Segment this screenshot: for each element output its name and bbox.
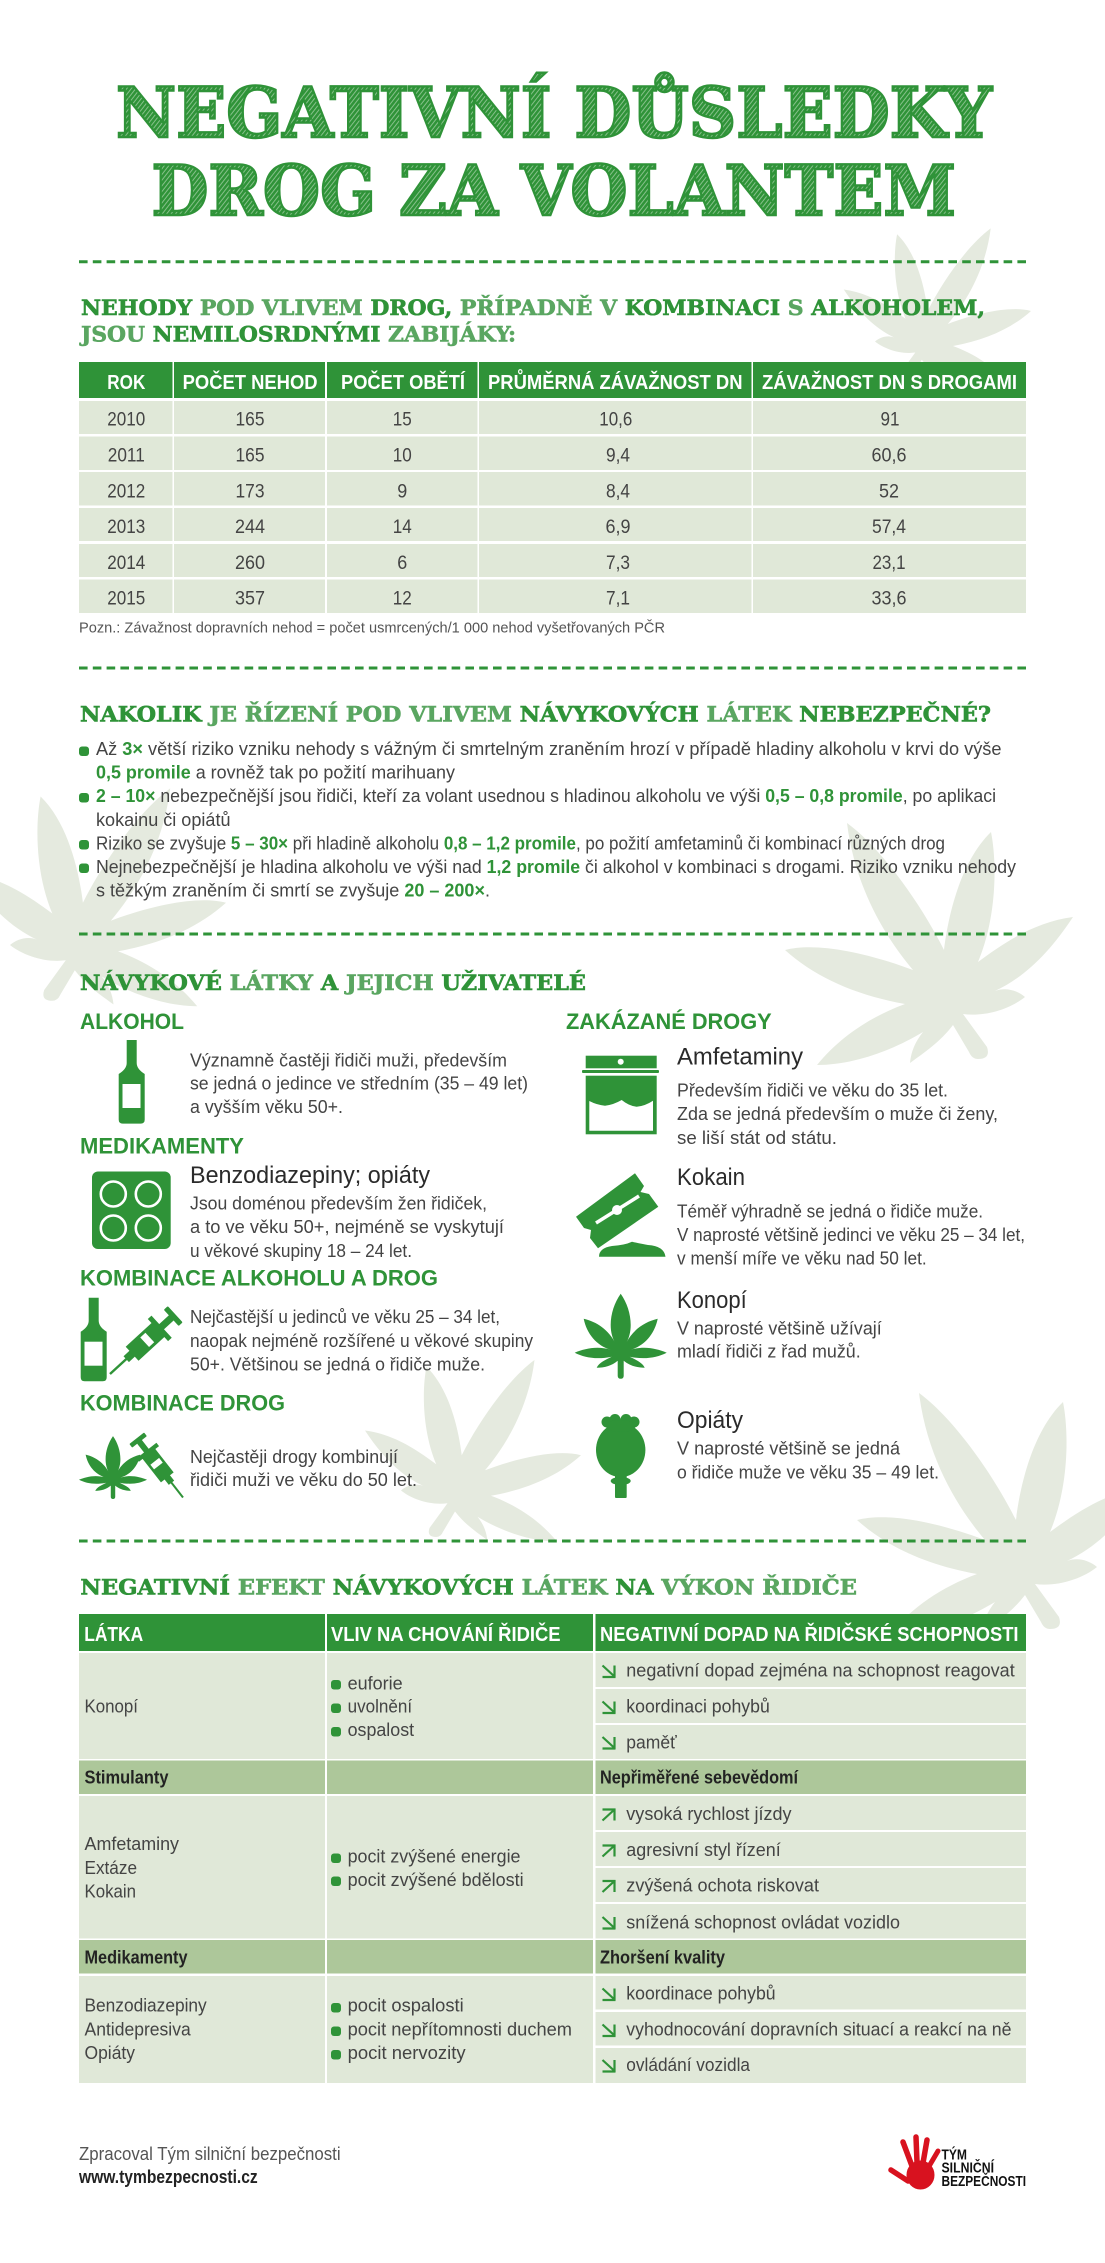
block: medication: MEDIKAMENTY	[80, 1134, 244, 1159]
block: alcohol and drugs	[80, 1266, 534, 1385]
table header: VLIV NA CHOVÁNÍ ŘIDIČE	[331, 1622, 561, 1646]
table rows: 91	[880, 410, 900, 431]
bullet list: risk levels: kokainu či opiátů	[96, 809, 230, 830]
row: stimulants: vysoká rychlost jízdy	[626, 1803, 792, 1824]
bullet list: risk levels: 2 – 10× nebezpečnější jsou řidiči, kteří za volant usednou s hladinou alkoholu ve výši 0,5 – 0,8 promile, po aplikaci	[96, 785, 996, 806]
table header: PRŮMĚRNÁ ZÁVAŽNOST DN	[488, 368, 742, 394]
block: cocaine: V naprosté většině jedinci ve věku 25 – 34 let,	[677, 1224, 1025, 1245]
block: cannabis: V naprosté většině užívají	[677, 1317, 883, 1338]
row: stimulants: snížená schopnost ovládat vozidlo	[626, 1911, 900, 1932]
block: alcohol: se jedná o jedince ve středním (35 – 49 let)	[190, 1072, 528, 1093]
icon: pill pack	[92, 1172, 171, 1249]
icon: bottle and syringe	[81, 1298, 185, 1385]
row: medication: koordinace pohybů	[626, 1982, 776, 2003]
block: cannabis: mladí řidiči z řad mužů.	[677, 1341, 861, 1362]
logo: Tým silniční bezpečnosti: TÝM	[942, 2146, 967, 2164]
row: stimulants: agresivní styl řízení	[626, 1839, 782, 1860]
row: cannabis: negativní dopad zejména na schopnost reagovat	[626, 1660, 1015, 1681]
row: cannabis: euforie	[348, 1672, 403, 1693]
bullet list: risk levels	[79, 738, 1017, 901]
table rows: 244	[235, 517, 265, 538]
block: alcohol: ALKOHOL	[80, 1009, 184, 1034]
block: amphetamines	[582, 1043, 998, 1148]
heading: accidents: JSOU NEMILOSRDNÝMI ZABIJÁKY:	[79, 321, 516, 348]
table: accidents by year	[79, 362, 1026, 613]
block: drug combinations: KOMBINACE DROG	[80, 1391, 285, 1416]
row: medication: ovládání vozidla	[626, 2054, 751, 2075]
table: effects of substances	[79, 1614, 1026, 2083]
table rows: 9,4	[606, 446, 630, 466]
table rows: 7,3	[606, 553, 630, 574]
bullet list: risk levels: Riziko se zvyšuje 5 – 30× při hladině alkoholu 0,8 – 1,2 promile, po požití amfetaminů či kombinací různých drog	[96, 832, 945, 853]
block: medication	[80, 1134, 505, 1261]
title: DROG ZA VOLANTEM	[152, 151, 956, 232]
table rows: 2013	[107, 517, 145, 538]
row: stimulants: pocit zvýšené energie	[348, 1846, 520, 1867]
icon: zip bag	[582, 1056, 659, 1134]
row: stimulants header: Nepřiměřené sebevědomí	[600, 1766, 799, 1787]
table rows: 260	[235, 553, 265, 574]
table header: POČET NEHOD	[183, 370, 318, 394]
table rows: 2015	[107, 588, 145, 610]
table rows: 6,9	[606, 517, 630, 538]
table rows: 15	[393, 410, 412, 431]
table rows: 2012	[107, 481, 145, 502]
block: cocaine: v menší míře ve věku nad 50 let.	[677, 1247, 927, 1268]
panel: negative effects	[79, 1573, 1026, 2083]
icon: razor blade and powder	[576, 1173, 666, 1257]
table rows: 60,6	[872, 446, 906, 466]
block: opiates: V naprosté většině se jedná	[677, 1437, 901, 1458]
bullet list: risk levels: Nejnebezpečnější je hladina alkoholu ve výši nad 1,2 promile či alkohol v kombinaci s drogami. Riziko vzniku nehody	[96, 856, 1017, 877]
background leaf: left	[0, 788, 226, 1006]
bullet list: risk levels: 0,5 promile a rovněž tak po požití marihuany	[96, 762, 456, 783]
logo: Tým silniční bezpečnosti	[891, 2137, 1026, 2190]
block: amphetamines: Zda se jedná především o muže či ženy,	[677, 1103, 998, 1124]
row: medication: vyhodnocování dopravních situací a reakcí na ně	[626, 2019, 1012, 2040]
block: alcohol and drugs: KOMBINACE ALKOHOLU A DROG	[80, 1266, 438, 1291]
table header	[79, 1614, 1026, 1651]
table rows: 10	[393, 446, 412, 466]
block: alcohol	[80, 1009, 528, 1124]
heading: accidents: NEHODY POD VLIVEM DROG, PŘÍPADNĚ V KOMBINACI S ALKOHOLEM,	[81, 294, 985, 321]
row: medication: pocit nervozity	[348, 2042, 466, 2063]
row: medication	[79, 1976, 1026, 2083]
block: opiates: o řidiče muže ve věku 35 – 49 let.	[677, 1461, 939, 1482]
table rows: 165	[236, 446, 264, 466]
footer credit: Zpracoval Tým silniční bezpečnosti	[79, 2144, 341, 2164]
table rows: 9	[397, 481, 407, 502]
table rows: 12	[393, 588, 412, 610]
icon: poppy head	[596, 1414, 645, 1498]
icon: leaf and syringe	[79, 1430, 193, 1505]
block: drug combinations: řidiči muži ve věku do 50 let.	[190, 1469, 417, 1490]
row: stimulants header	[79, 1760, 1026, 1794]
block: medication: a to ve věku 50+, nejméně se vyskytují	[190, 1216, 505, 1237]
block: cannabis	[575, 1287, 883, 1379]
block: drug combinations	[79, 1391, 417, 1505]
table rows: 2010	[107, 410, 145, 431]
table rows: 2014	[107, 553, 146, 574]
table header: NEGATIVNÍ DOPAD NA ŘIDIČSKÉ SCHOPNOSTI	[600, 1622, 1018, 1646]
panel: accident statistics	[79, 294, 1026, 636]
table rows: 14	[393, 517, 412, 538]
row: stimulants: Kokain	[84, 1881, 136, 1902]
block: opiates	[596, 1407, 939, 1498]
row: cannabis: Konopí	[84, 1696, 139, 1716]
table rows: 52	[879, 481, 899, 502]
table header	[79, 362, 1026, 398]
title	[116, 72, 993, 232]
heading: negative effects: NEGATIVNÍ EFEKT NÁVYKOVÝCH LÁTEK NA VÝKON ŘIDIČE	[80, 1573, 857, 1600]
row: cannabis: uvolnění	[348, 1696, 413, 1717]
block: opiates: Opiáty	[677, 1407, 743, 1434]
panel: how dangerous	[79, 701, 1017, 901]
block: medication: Benzodiazepiny; opiáty	[190, 1162, 430, 1189]
heading: accidents	[79, 294, 985, 348]
row: cannabis: paměť	[626, 1731, 678, 1752]
icon: red hand	[891, 2137, 938, 2188]
table header: ROK	[107, 372, 146, 394]
row: stimulants: Amfetaminy	[84, 1833, 180, 1854]
row: stimulants: Extáze	[84, 1857, 137, 1878]
row: medication: Antidepresiva	[84, 2018, 191, 2039]
table rows: 33,6	[872, 588, 906, 610]
row: cannabis: ospalost	[348, 1719, 414, 1740]
table rows: 357	[235, 588, 265, 610]
block: alcohol and drugs: naopak nejméně rozšířené u věkové skupiny	[190, 1330, 534, 1351]
bullet list: risk levels: s těžkým zraněním či smrtí se zvyšuje 20 – 200×.	[96, 880, 490, 901]
row: medication: Opiáty	[84, 2042, 136, 2063]
row: stimulants: pocit zvýšené bdělosti	[348, 1869, 524, 1890]
row: medication: Benzodiazepiny	[84, 1995, 207, 2016]
table rows	[79, 401, 1026, 613]
footer credit: www.tymbezpecnosti.cz	[78, 2167, 258, 2187]
panel: substances and users	[79, 969, 1025, 1505]
block: alcohol and drugs: Nejčastější u jedinců ve věku 25 – 34 let,	[190, 1306, 500, 1327]
table rows: 165	[236, 410, 264, 431]
icon: cannabis leaf	[575, 1294, 667, 1379]
table header: ZÁVAŽNOST DN S DROGAMI	[762, 370, 1017, 394]
table header: LÁTKA	[84, 1623, 143, 1646]
table rows: 8,4	[606, 481, 630, 502]
logo: Tým silniční bezpečnosti: BEZPEČNOSTI	[942, 2172, 1026, 2190]
logo: Tým silniční bezpečnosti: SILNIČNÍ	[942, 2159, 995, 2177]
title: NEGATIVNÍ DŮSLEDKY	[116, 72, 993, 154]
row: medication header: Zhoršení kvality	[600, 1946, 726, 1967]
block: alcohol: a vyšším věku 50+.	[190, 1096, 343, 1117]
row: medication header	[79, 1940, 1026, 1974]
table rows: 7,1	[606, 588, 630, 610]
background leaf: bottom right	[857, 1393, 1105, 1635]
background leaf: centre	[365, 1360, 581, 1542]
block: cocaine	[576, 1164, 1025, 1268]
block: cocaine: Kokain	[677, 1164, 745, 1191]
row: stimulants: zvýšená ochota riskovat	[626, 1875, 819, 1896]
heading: how dangerous: NAKOLIK JE ŘÍZENÍ POD VLIVEM NÁVYKOVÝCH LÁTEK NEBEZPEČNÉ?	[80, 701, 991, 728]
block: medication: Jsou doménou především žen řidiček,	[190, 1192, 487, 1213]
table rows: 57,4	[872, 517, 906, 538]
block: alcohol: Významně častěji řidiči muži, především	[190, 1049, 507, 1070]
heading: substances and users: NÁVYKOVÉ LÁTKY A JEJICH UŽIVATELÉ	[80, 969, 586, 996]
table rows: 2011	[108, 446, 145, 466]
row: cannabis: koordinaci pohybů	[626, 1696, 770, 1717]
table header: POČET OBĚTÍ	[341, 370, 465, 394]
table rows: 173	[236, 481, 264, 502]
block: amphetamines: Především řidiči ve věku do 35 let.	[677, 1080, 948, 1101]
block: illegal drugs heading: ZAKÁZANÉ DROGY	[566, 1009, 772, 1034]
table note: Pozn.: Závažnost dopravních nehod = počet usmrcených/1 000 nehod vyšetřovaných PČR	[79, 620, 665, 636]
table rows: 10,6	[599, 410, 632, 431]
block: cannabis: Konopí	[677, 1287, 747, 1314]
row: medication: pocit nepřítomnosti duchem	[348, 2018, 572, 2039]
block: alcohol and drugs: 50+. Většinou se jedná o řidiče muže.	[190, 1354, 485, 1375]
table rows: 6	[397, 553, 407, 574]
block: amphetamines: Amfetaminy	[677, 1043, 803, 1070]
background leaf: right middle	[785, 823, 1073, 1065]
table rows: 23,1	[872, 553, 906, 574]
block: amphetamines: se liší stát od státu.	[677, 1127, 837, 1148]
row: stimulants	[79, 1796, 1026, 1938]
background leaf: top right	[844, 228, 1031, 386]
row: cannabis	[79, 1653, 1026, 1759]
row: medication header: Medikamenty	[84, 1946, 188, 1967]
block: cocaine: Téměř výhradně se jedná o řidiče muže.	[677, 1200, 983, 1221]
block: medication: u věkové skupiny 18 – 24 let.	[190, 1240, 412, 1261]
block: drug combinations: Nejčastěji drogy kombinují	[190, 1446, 399, 1467]
row: medication: pocit ospalosti	[348, 1995, 464, 2016]
footer credit	[78, 2144, 341, 2187]
bullet list: risk levels: Až 3× větší riziko vzniku nehody s vážným či smrtelným zraněním hrozí v případě hladiny alkoholu v krvi do výše	[96, 738, 1002, 759]
row: stimulants header: Stimulanty	[84, 1766, 169, 1787]
icon: bottle	[119, 1040, 145, 1124]
